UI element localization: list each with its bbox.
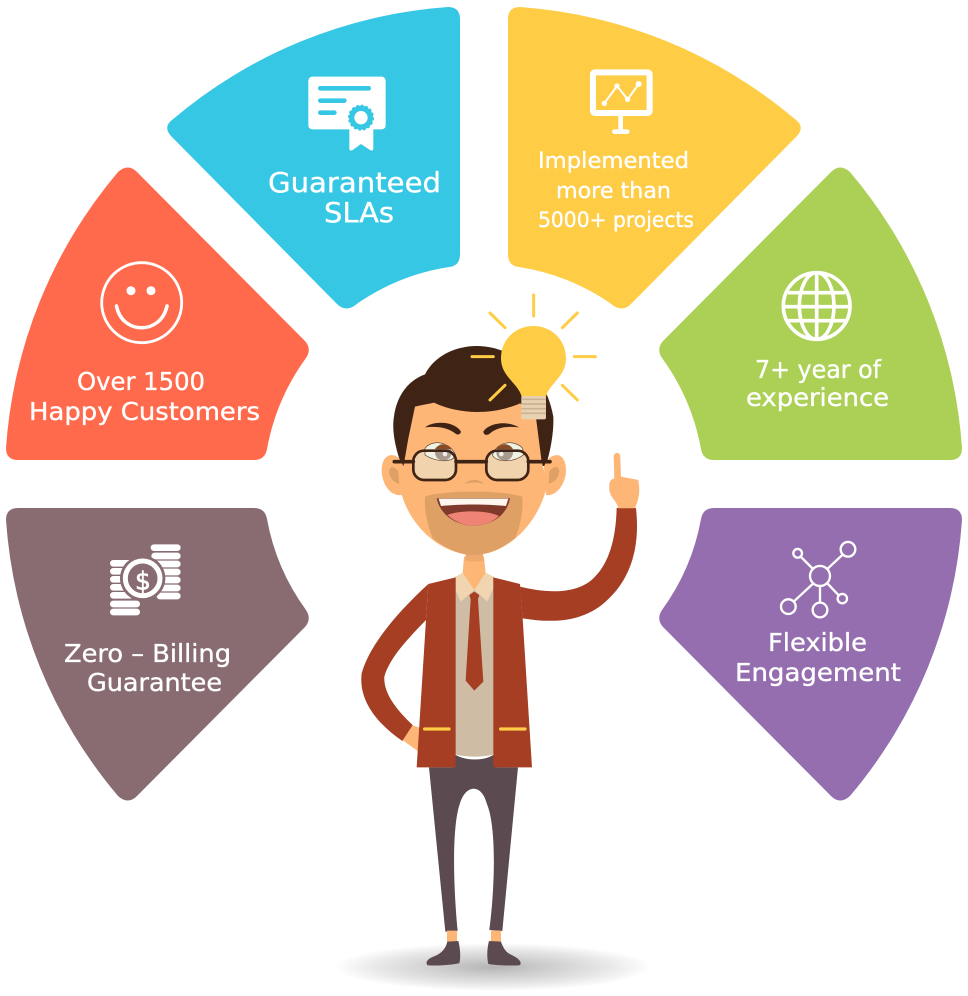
heading: Guaranteed SLAs: Guaranteed: [268, 167, 441, 199]
hair back: [393, 346, 553, 466]
panel: Zero Billing Guarantee: [6, 508, 309, 800]
text: Zero – Billing Guarantee: Guarantee: [87, 668, 222, 697]
eyes: [425, 443, 456, 461]
beard: [425, 492, 522, 555]
raised arm: [520, 508, 637, 621]
shoes: [427, 941, 521, 966]
shirt: [455, 577, 494, 757]
trousers: [429, 755, 518, 932]
text: Over 1500 Happy Customers: Over 1500: [77, 367, 205, 396]
icon: globe: [783, 273, 850, 339]
jacket: [417, 577, 532, 767]
nose: [465, 480, 484, 484]
icon: network: [781, 542, 855, 617]
text: Flexible Engagement: [735, 628, 901, 687]
panel: Guaranteed SLAs: [167, 7, 460, 308]
text: Implemented more than 5000+ projects: 5000+ projects: [538, 208, 694, 232]
rays: [472, 295, 595, 400]
collar: [456, 573, 493, 602]
neck: [463, 557, 486, 591]
text: Implemented more than 5000+ projects: more than: [556, 178, 671, 204]
icon text: dollar sign: $: [135, 566, 151, 596]
text: 7+ year of experience: experience: [746, 383, 889, 412]
text: Over 1500 Happy Customers: Happy Customers: [29, 397, 260, 426]
panel: Flexible Engagement: [659, 508, 962, 800]
icon: coins: [110, 544, 181, 615]
text: Over 1500 Happy Customers: [29, 367, 260, 426]
heading: Guaranteed SLAs: [268, 167, 441, 229]
eyebrows: [425, 423, 519, 435]
text: 7+ year of experience: [746, 355, 889, 412]
icon: smiley: [102, 263, 182, 343]
panel: Implemented projects: [508, 7, 801, 308]
lenses: [413, 451, 456, 480]
neck shadow: [465, 552, 484, 562]
face: [399, 403, 547, 555]
text: Flexible Engagement: Engagement: [735, 658, 901, 687]
icon: certificate: [308, 77, 386, 151]
light bulb: [501, 326, 566, 397]
panel: experience: [659, 168, 962, 460]
left arm: [361, 584, 428, 741]
heading: Guaranteed SLAs: SLAs: [324, 197, 394, 229]
ground shadow: [335, 943, 651, 991]
mouth: [437, 498, 510, 526]
panel: Happy Customers: [6, 168, 309, 460]
text: 7+ year of experience: 7+ year of: [755, 355, 882, 384]
ears: [382, 455, 403, 495]
ankles: [447, 931, 501, 942]
text: Flexible Engagement: Flexible: [768, 628, 867, 657]
text: Zero – Billing Guarantee: Zero – Billing: [64, 639, 231, 668]
tie: [466, 592, 483, 691]
text: Zero – Billing Guarantee: [64, 639, 231, 697]
character: head: [382, 295, 639, 562]
icon: presentation chart: [593, 72, 650, 132]
pockets: [425, 724, 525, 734]
hand on hip: [402, 725, 422, 753]
glasses frame: [394, 451, 550, 480]
text: Implemented more than 5000+ projects: [538, 148, 694, 232]
character: body: [361, 508, 637, 966]
text: Implemented more than 5000+ projects: Implemented: [538, 148, 689, 174]
raised hand: [609, 453, 639, 508]
